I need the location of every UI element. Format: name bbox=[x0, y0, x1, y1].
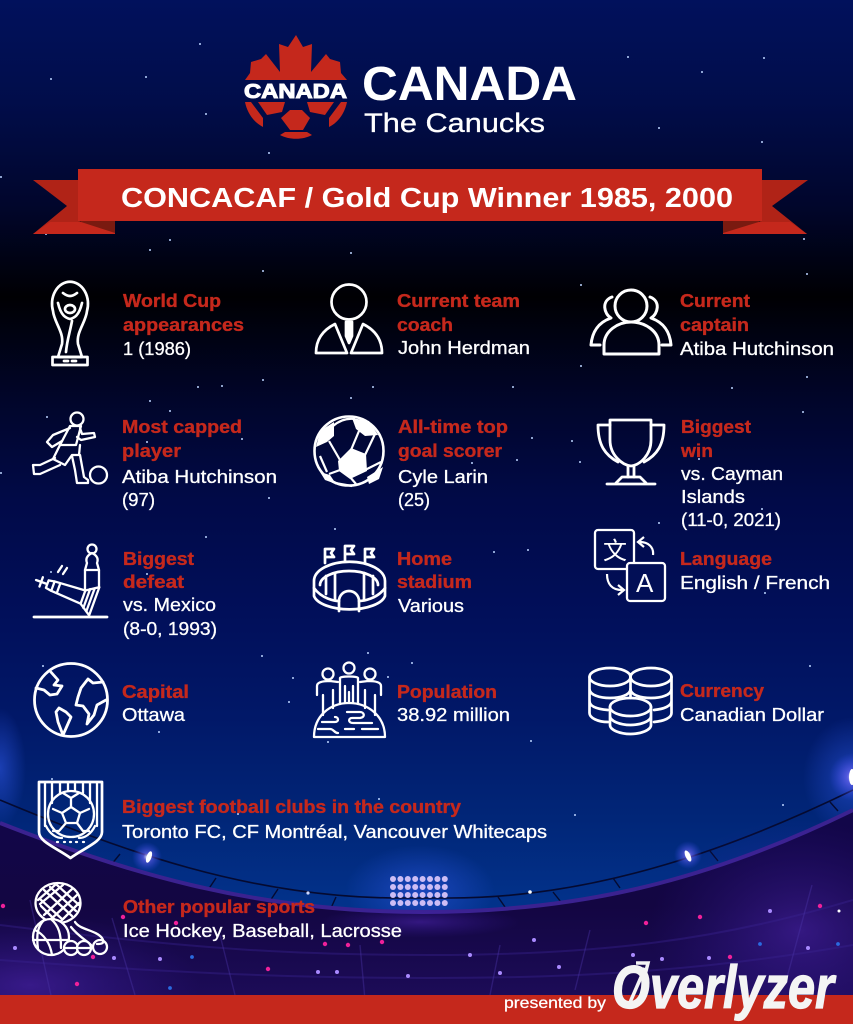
value: Atiba Hutchinson bbox=[680, 339, 834, 359]
heading: Biggest bbox=[123, 549, 194, 569]
left ribbon tail bbox=[33, 180, 80, 234]
panel: Current team coach bbox=[316, 284, 530, 358]
heading: Biggest football clubs in the country bbox=[122, 797, 461, 817]
value: John Herdman bbox=[398, 338, 530, 358]
icon: coin stacks bbox=[590, 668, 672, 734]
right ribbon tail bbox=[760, 180, 808, 234]
panel: Home stadium bbox=[314, 546, 472, 616]
ribbon band bbox=[78, 169, 762, 221]
icon: stadium bbox=[314, 546, 385, 611]
heading: Language bbox=[680, 549, 772, 569]
panel: Biggest win bbox=[598, 417, 783, 530]
subtitle: The Canucks: The Canucks bbox=[364, 108, 545, 138]
icon: people on globe bbox=[314, 662, 385, 737]
heading: Currency bbox=[680, 681, 764, 701]
heading bbox=[123, 549, 194, 592]
heading: Other popular sports bbox=[123, 897, 315, 917]
ball patches bbox=[245, 102, 347, 139]
value: Islands bbox=[681, 487, 745, 507]
panel: World Cup appearances bbox=[52, 282, 244, 365]
value bbox=[398, 467, 488, 510]
heading bbox=[397, 291, 520, 335]
icon: coach bbox=[316, 284, 382, 353]
presented by: presented by bbox=[504, 995, 606, 1012]
logo: Canada soccer crest bbox=[244, 35, 347, 139]
heading: Current bbox=[680, 291, 750, 311]
value: (97) bbox=[122, 490, 155, 510]
value: Ice Hockey, Baseball, Lacrosse bbox=[123, 921, 402, 941]
value: Cyle Larin bbox=[398, 467, 488, 487]
heading: stadium bbox=[397, 572, 472, 592]
value bbox=[681, 464, 783, 530]
heading: player bbox=[122, 441, 181, 461]
heading bbox=[398, 417, 508, 461]
stadium background bbox=[0, 708, 853, 1024]
heading: Most capped bbox=[122, 417, 242, 437]
ribbon banner bbox=[33, 169, 808, 234]
ribbon text: CONCACAF / Gold Cup Winner 1985, 2000 bbox=[121, 182, 733, 213]
icon: translate: 文 bbox=[603, 538, 627, 565]
value: 1 (1986) bbox=[123, 339, 191, 359]
value: Toronto FC, CF Montréal, Vancouver Whitecaps bbox=[122, 822, 547, 842]
icon: soccer ball bbox=[314, 416, 384, 486]
icon: translate: A bbox=[636, 568, 654, 598]
panel: Currency bbox=[590, 668, 824, 734]
panel: Biggest defeat bbox=[31, 544, 217, 639]
icon: world cup trophy bbox=[52, 282, 88, 365]
icon: globe bbox=[34, 664, 108, 736]
panel: All-time top goal scorer bbox=[314, 416, 508, 510]
panel: Other popular sports bbox=[33, 883, 402, 955]
value: (11-0, 2021) bbox=[681, 510, 781, 530]
heading bbox=[123, 291, 244, 335]
heading: appearances bbox=[123, 315, 244, 335]
panel: Language bbox=[595, 530, 830, 601]
heading bbox=[680, 417, 751, 461]
heading bbox=[122, 417, 242, 461]
heading bbox=[397, 549, 472, 592]
heading: coach bbox=[397, 315, 453, 335]
panel: Biggest football clubs bbox=[39, 782, 547, 858]
heading: defeat bbox=[123, 572, 184, 592]
panel: Current captain bbox=[591, 290, 834, 359]
value bbox=[122, 467, 277, 510]
crest wordmark: CANADA bbox=[244, 81, 347, 103]
stadium crowd lights bbox=[1, 904, 841, 990]
heading: win bbox=[680, 441, 713, 461]
value: 38.92 million bbox=[397, 705, 510, 725]
heading: Home bbox=[397, 549, 452, 569]
stands bbox=[0, 810, 853, 1024]
roof wire bbox=[0, 790, 853, 898]
heading: Capital bbox=[122, 682, 189, 702]
stars bbox=[0, 43, 843, 854]
footer bar bbox=[0, 995, 853, 1024]
title: CANADA: CANADA bbox=[362, 58, 577, 111]
heading: World Cup bbox=[123, 291, 221, 311]
heading: Current team bbox=[397, 291, 520, 311]
heading: Population bbox=[397, 682, 497, 702]
icon: club shield bbox=[39, 782, 102, 858]
icon: translate bbox=[595, 530, 665, 601]
value: vs. Mexico bbox=[123, 595, 216, 615]
value: vs. Cayman bbox=[681, 464, 783, 484]
panel: Population bbox=[314, 662, 510, 737]
floodlight panel bbox=[390, 876, 448, 906]
value: (25) bbox=[398, 490, 430, 510]
stadium spotlights bbox=[132, 753, 853, 895]
value bbox=[123, 595, 217, 639]
panel: Capital bbox=[34, 664, 189, 736]
value: Atiba Hutchinson bbox=[122, 467, 277, 487]
panel: Most capped player bbox=[33, 412, 277, 510]
value: Various bbox=[398, 596, 464, 616]
value: (8-0, 1993) bbox=[123, 619, 217, 639]
value: English / French bbox=[680, 573, 830, 593]
heading bbox=[680, 291, 750, 335]
maple leaf bbox=[245, 35, 347, 80]
icon: captain group bbox=[591, 290, 671, 354]
icon: toppled chess king bbox=[31, 544, 107, 617]
heading: captain bbox=[680, 315, 749, 335]
value: Ottawa bbox=[122, 705, 186, 725]
icon: racket and balls bbox=[33, 883, 107, 955]
heading: Biggest bbox=[681, 417, 751, 437]
heading: goal scorer bbox=[398, 441, 502, 461]
icon: trophy cup bbox=[598, 420, 664, 484]
icon: footballer kicking ball bbox=[33, 412, 107, 484]
value: Canadian Dollar bbox=[680, 705, 824, 725]
heading: All-time top bbox=[398, 417, 508, 437]
